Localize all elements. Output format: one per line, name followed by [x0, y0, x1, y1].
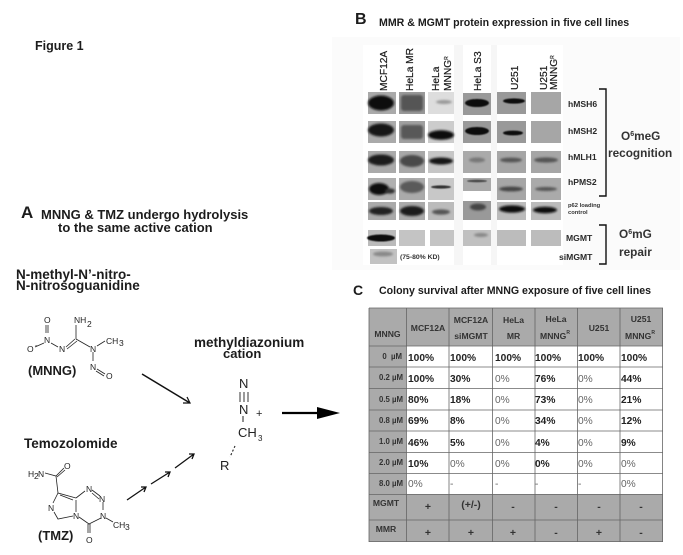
row: MGMT status: - — [511, 501, 515, 513]
MNNG abbreviation: (MNNG) — [28, 363, 76, 378]
row: 2.0 uM: 0% — [621, 459, 636, 470]
methyldiazonium structure: + — [256, 408, 262, 420]
cell line labels — [379, 48, 560, 91]
cell line labels: U251 — [539, 65, 550, 90]
panel B heading — [355, 11, 629, 29]
row: 2.0 uM: 0% — [495, 459, 510, 470]
row: MGMT status: - — [554, 501, 558, 513]
blot row: hMLH1 — [368, 151, 561, 173]
panel C heading: C — [353, 282, 363, 298]
panel A heading: MNNG & TMZ undergo hydrolysis — [41, 207, 248, 222]
row: 0 uM: 0 µM — [382, 352, 402, 361]
TMZ structure: 3 — [125, 522, 130, 532]
row: 1.0 uM: 0% — [578, 438, 593, 449]
MNNG structure: N — [44, 335, 50, 345]
methyldiazonium structure: CH — [238, 425, 257, 440]
cell line labels: MNNG — [549, 59, 560, 90]
row: 1.0 uM: 4% — [535, 438, 550, 449]
row: 8.0 uM — [379, 479, 636, 490]
O6meG recognition label: 6 — [630, 131, 634, 138]
row: 2.0 uM: 0% — [578, 459, 593, 470]
row: 0.8 uM: 8% — [450, 416, 465, 427]
row: MGMT status — [373, 498, 643, 513]
row: MMR status — [376, 524, 643, 539]
row: 0.2 uM: 0% — [495, 374, 510, 385]
MNNG structure: - — [35, 340, 38, 350]
row: MGMT status: MGMT — [373, 498, 400, 508]
row: 0 uM: 100% — [621, 353, 647, 364]
table header: siMGMT — [454, 331, 488, 341]
row: MMR status: MMR — [376, 524, 397, 534]
row: MGMT status: (+/-) — [461, 499, 481, 511]
cell line labels: HeLa MR — [405, 48, 416, 91]
row: 8.0 uM: - — [450, 479, 453, 490]
blot row: siMGMT: (75-80% KD) — [400, 254, 440, 261]
row: 0.5 uM: 18% — [450, 395, 470, 406]
arrow: MNNG to cation — [142, 374, 190, 403]
table header: MNNG — [374, 329, 401, 339]
protein labels: hPMS2 — [568, 177, 597, 187]
row: 0.2 uM — [379, 373, 641, 385]
TMZ structure: O — [64, 461, 71, 471]
row: 0.8 uM: 0% — [495, 416, 510, 427]
TMZ structure: O — [86, 535, 93, 545]
O6mG repair label: O — [619, 227, 628, 241]
row: 2.0 uM — [379, 458, 636, 470]
protein labels: control — [568, 210, 588, 216]
MNNG full name — [16, 267, 140, 293]
row: 0 uM — [382, 352, 647, 364]
row: 0.8 uM: 69% — [408, 416, 428, 427]
row: MMR status: + — [468, 527, 474, 539]
row: MMR status: - — [554, 527, 558, 539]
row: 0 uM: 100% — [578, 353, 604, 364]
row: MGMT status: - — [639, 501, 643, 513]
bracket: repair — [599, 225, 606, 264]
MNNG full name: N-methyl-N’-nitro- — [16, 267, 131, 282]
table header: U251 — [631, 314, 651, 324]
row: 0.5 uM: 80% — [408, 395, 428, 406]
panel B heading: MMR & MGMT protein expression in five cell lines — [379, 17, 629, 29]
row: 0 uM: 100% — [495, 353, 521, 364]
row: 0.2 uM: 44% — [621, 374, 641, 385]
arrows: TMZ to cation — [127, 454, 194, 500]
row: MGMT status: - — [597, 501, 601, 513]
blot row: hPMS2 — [368, 178, 561, 200]
row: 1.0 uM: 0% — [495, 438, 510, 449]
row: 8.0 uM: - — [495, 479, 498, 490]
table header: U251 — [589, 323, 609, 333]
row: MMR status: - — [639, 527, 643, 539]
protein labels: MGMT — [566, 233, 593, 243]
blot row: siMGMT — [370, 249, 440, 264]
row: MMR status: + — [596, 527, 602, 539]
row: 0.2 uM: 0.2 µM — [379, 373, 403, 382]
row: 1.0 uM: 5% — [450, 438, 465, 449]
row: 0.8 uM — [379, 416, 641, 427]
table header: MCF12A — [454, 315, 488, 325]
cation label: cation — [223, 346, 261, 361]
methyldiazonium structure: N — [239, 402, 248, 417]
cell line labels: U251 — [510, 65, 521, 90]
row: 0.5 uM: 0% — [495, 395, 510, 406]
MNNG structure: N — [59, 344, 65, 354]
O6mG repair label: mG — [632, 227, 652, 241]
row: 1.0 uM: 1.0 µM — [379, 437, 403, 446]
TMZ structure: CH — [113, 520, 125, 530]
table header: HeLa — [545, 314, 567, 324]
row: 1.0 uM: 46% — [408, 438, 428, 449]
row: 0 uM: 100% — [535, 353, 561, 364]
MNNG structure: 3 — [119, 338, 124, 348]
TMZ structure: N — [86, 484, 92, 494]
row: 0.2 uM: 76% — [535, 374, 555, 385]
TMZ structure: N — [100, 511, 106, 521]
MNNG structure: 2 — [87, 319, 92, 329]
row: MGMT status: + — [425, 501, 431, 513]
row: 0.5 uM — [379, 395, 641, 406]
protein labels: hMSH2 — [568, 126, 597, 136]
row: 0.5 uM: 0.5 µM — [379, 395, 403, 404]
table header: R — [651, 330, 655, 336]
TMZ structure: N — [99, 494, 105, 504]
row: 8.0 uM: 0% — [621, 479, 636, 490]
MNNG full name: N-nitrosoguanidine — [16, 278, 140, 293]
panel A heading: A — [21, 203, 33, 222]
blot row: hMSH2 — [368, 121, 561, 143]
panel B heading: B — [355, 11, 367, 28]
row: 0.5 uM: 0% — [578, 395, 593, 406]
row: 2.0 uM: 0% — [450, 459, 465, 470]
TMZ name: Temozolomide — [24, 436, 118, 451]
row: 2.0 uM: 0% — [535, 459, 550, 470]
row: 0.5 uM: 21% — [621, 395, 641, 406]
MNNG structure: CH — [106, 336, 118, 346]
table header — [374, 314, 655, 341]
table header: R — [566, 330, 570, 336]
protein labels: hMSH6 — [568, 99, 597, 109]
O6meG recognition label: O — [621, 129, 630, 143]
panel C heading: Colony survival after MNNG exposure of five cell lines — [379, 285, 651, 297]
row: 8.0 uM: 8.0 µM — [379, 479, 403, 488]
row: MMR status: + — [425, 527, 431, 539]
bracket: recognition — [599, 89, 606, 196]
TMZ structure: 2 — [34, 471, 39, 481]
row: 2.0 uM: 2.0 µM — [379, 458, 403, 467]
TMZ structure: N — [73, 511, 79, 521]
cell line labels: HeLa — [431, 66, 442, 91]
row: 0.2 uM: 0% — [578, 374, 593, 385]
O6mG repair label — [619, 227, 652, 259]
row: 0.8 uM: 0.8 µM — [379, 416, 403, 425]
MNNG structure — [27, 315, 124, 381]
row: 1.0 uM: 9% — [621, 438, 636, 449]
row: 8.0 uM: 0% — [408, 479, 423, 490]
row: 0.8 uM: 34% — [535, 416, 555, 427]
cell line labels: HeLa S3 — [473, 51, 484, 91]
TMZ abbreviation: (TMZ) — [38, 528, 73, 543]
methyldiazonium structure — [220, 376, 263, 473]
MNNG structure: NH — [74, 315, 86, 325]
table header: HeLa — [503, 315, 524, 325]
row: 2.0 uM: 10% — [408, 459, 428, 470]
cation label — [194, 335, 304, 361]
TMZ structure — [28, 461, 130, 545]
MNNG structure: O — [44, 315, 51, 325]
panel: western blots — [332, 37, 680, 270]
MNNG structure: O — [27, 344, 34, 354]
table header: MCF12A — [411, 323, 445, 333]
table header: MR — [507, 331, 521, 341]
O6meG recognition label: meG — [634, 129, 660, 143]
TMZ structure: H — [28, 469, 34, 479]
row: 1.0 uM — [379, 437, 636, 449]
row: 0 uM: 100% — [408, 353, 434, 364]
panel C heading — [353, 282, 651, 298]
TMZ structure: N — [48, 503, 54, 513]
row: 0.2 uM: 100% — [408, 374, 434, 385]
blot row: p62 loading control — [368, 201, 561, 220]
O6mG repair label: repair — [619, 245, 652, 259]
cell line labels: MNNG — [443, 60, 454, 91]
row: 0.8 uM: 12% — [621, 416, 641, 427]
methyldiazonium structure: R — [220, 458, 229, 473]
MNNG structure: O — [106, 371, 113, 381]
blot row: hMSH6 — [368, 92, 561, 115]
row: 0.5 uM: 73% — [535, 395, 555, 406]
panel A heading — [21, 203, 248, 235]
cell line labels: R — [444, 56, 450, 60]
TMZ structure: N — [38, 469, 44, 479]
arrow: cation to table — [282, 407, 340, 419]
cell line labels: R — [550, 55, 556, 59]
MNNG structure: N — [90, 344, 96, 354]
MNNG structure: N — [90, 362, 96, 372]
row: 0.2 uM: 30% — [450, 374, 470, 385]
O6meG recognition label: recognition — [608, 146, 672, 160]
blot row: MGMT — [367, 230, 561, 246]
row: 8.0 uM: - — [535, 479, 538, 490]
O6mG repair label: 6 — [628, 229, 632, 236]
row: MMR status: + — [510, 527, 516, 539]
row: 8.0 uM: - — [578, 479, 581, 490]
table: colony survival — [369, 308, 663, 542]
protein labels: p62 loading — [568, 203, 601, 209]
table header: MNNG — [625, 331, 651, 341]
panel A heading: to the same active cation — [58, 220, 213, 235]
cell line labels: MCF12A — [379, 51, 390, 91]
cation label: methyldiazonium — [194, 335, 304, 350]
row: 0 uM: 100% — [450, 353, 476, 364]
protein labels: hMLH1 — [568, 152, 597, 162]
methyldiazonium structure: 3 — [258, 434, 263, 443]
figure label: Figure 1 — [35, 39, 84, 53]
methyldiazonium structure: N — [239, 376, 248, 391]
protein labels — [559, 99, 601, 262]
O6meG recognition label — [608, 129, 672, 160]
row: 0.8 uM: 0% — [578, 416, 593, 427]
table header: MNNG — [540, 331, 566, 341]
protein labels: siMGMT — [559, 252, 593, 262]
